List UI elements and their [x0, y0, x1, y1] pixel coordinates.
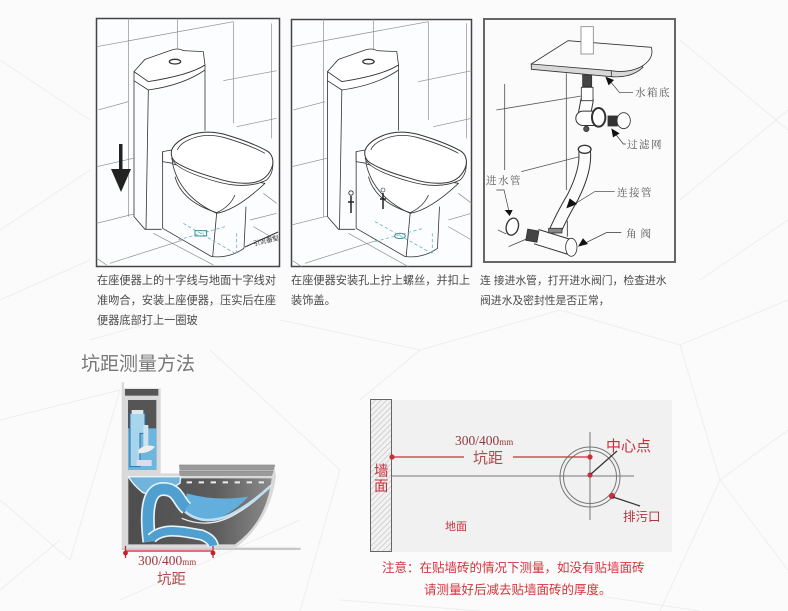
label: sealant: [245, 232, 280, 248]
label: connecting pipe: 连接管: [617, 186, 653, 199]
icon: floor cross marks: [375, 222, 432, 253]
label: floor: 地面: [445, 520, 467, 533]
rim holes: [187, 479, 270, 485]
wall: [370, 400, 392, 552]
panel: step 1 install toilet: [96, 18, 280, 266]
text: step 1 caption: 准吻合，安装上座便器，压实后在座: [97, 293, 276, 307]
floor line: [122, 548, 301, 550]
icon: connecting pipe: [555, 152, 585, 231]
icon: floor cross marks: [178, 223, 237, 253]
label: sealant: 引流番型: [252, 233, 280, 248]
icon: toilet: [134, 49, 273, 257]
icon: inlet pipe ring: [504, 217, 520, 237]
text: step 2 caption: 在座便器安装孔上拧上螺丝，并扣上: [291, 273, 470, 287]
wall and floor lines: [97, 18, 277, 265]
dimension line: [124, 546, 215, 558]
label: wall: 墙: [374, 463, 388, 480]
label: pit distance: 坑距: [157, 571, 186, 588]
label: distance value: 300/400mm: [138, 553, 196, 568]
text: step 1 caption: [97, 273, 276, 327]
text: step 3 caption: 阀进水及密封性是否正常，: [480, 293, 610, 307]
text: step 1 caption: 便器底部打上一圈玻: [97, 313, 198, 327]
text: step 1 caption: 在座便器上的十字线与地面十字线对: [97, 273, 276, 287]
icon: valve and filter: [583, 75, 592, 87]
ceramic dark interior: [128, 478, 272, 544]
icon: down arrow: [111, 144, 131, 192]
text: note: 请测量好后减去贴墙面砖的厚度。: [424, 582, 612, 597]
wall and floor lines: [292, 18, 472, 267]
label: filter: 过滤网: [627, 138, 663, 151]
thin guide lines: [496, 73, 581, 247]
text: note: 注意：在贴墙砖的情况下测量，如没有贴墙面砖: [382, 560, 645, 575]
text: step 3 caption: [480, 273, 667, 307]
leaders: [591, 451, 640, 506]
panel: step 3 water connection: [484, 19, 675, 262]
ceramic shell: [122, 382, 276, 548]
tank lid: [125, 389, 158, 396]
label: wall: 面: [374, 479, 388, 495]
water: bowl: [185, 493, 248, 520]
seat: [179, 465, 275, 476]
leader lines: [496, 81, 633, 243]
dimension line: [390, 455, 614, 498]
label: center point: 中心点: [606, 438, 651, 455]
icon: screws: [348, 188, 386, 213]
icon: angle valve: [536, 237, 571, 247]
label: angle valve: 角阀: [626, 227, 655, 240]
label: tank base: 水箱底: [635, 86, 671, 99]
drain cap: [149, 544, 158, 547]
icon: toilet: [327, 49, 466, 257]
floor area: [392, 400, 672, 552]
label: wall: [374, 463, 388, 495]
label: drain: 排污口: [623, 510, 661, 524]
icon: tank base: [531, 64, 643, 77]
text: step 3 caption: 连 接进水管，打开进水阀门，检查进水: [480, 273, 667, 287]
axes: [392, 432, 634, 520]
label: inlet pipe: 进水管: [486, 174, 522, 187]
tank interior: [128, 400, 156, 468]
heading: measurement method: 坑距测量方法: [81, 353, 195, 375]
text: step 2 caption: 装饰盖。: [291, 293, 336, 307]
label: distance value: 300/400mm: [455, 433, 513, 448]
text: note: [382, 560, 645, 597]
text: step 2 caption: [291, 273, 470, 307]
chart: floor plan diagram: [370, 400, 672, 552]
water: upper channel: [128, 477, 181, 493]
chart: toilet cross-section: [122, 382, 301, 588]
water: siphon arch: [148, 489, 187, 542]
water: lower pipe: [152, 531, 213, 546]
panel: step 2 screws: [292, 18, 472, 267]
label: pit distance: 坑距: [473, 450, 503, 467]
